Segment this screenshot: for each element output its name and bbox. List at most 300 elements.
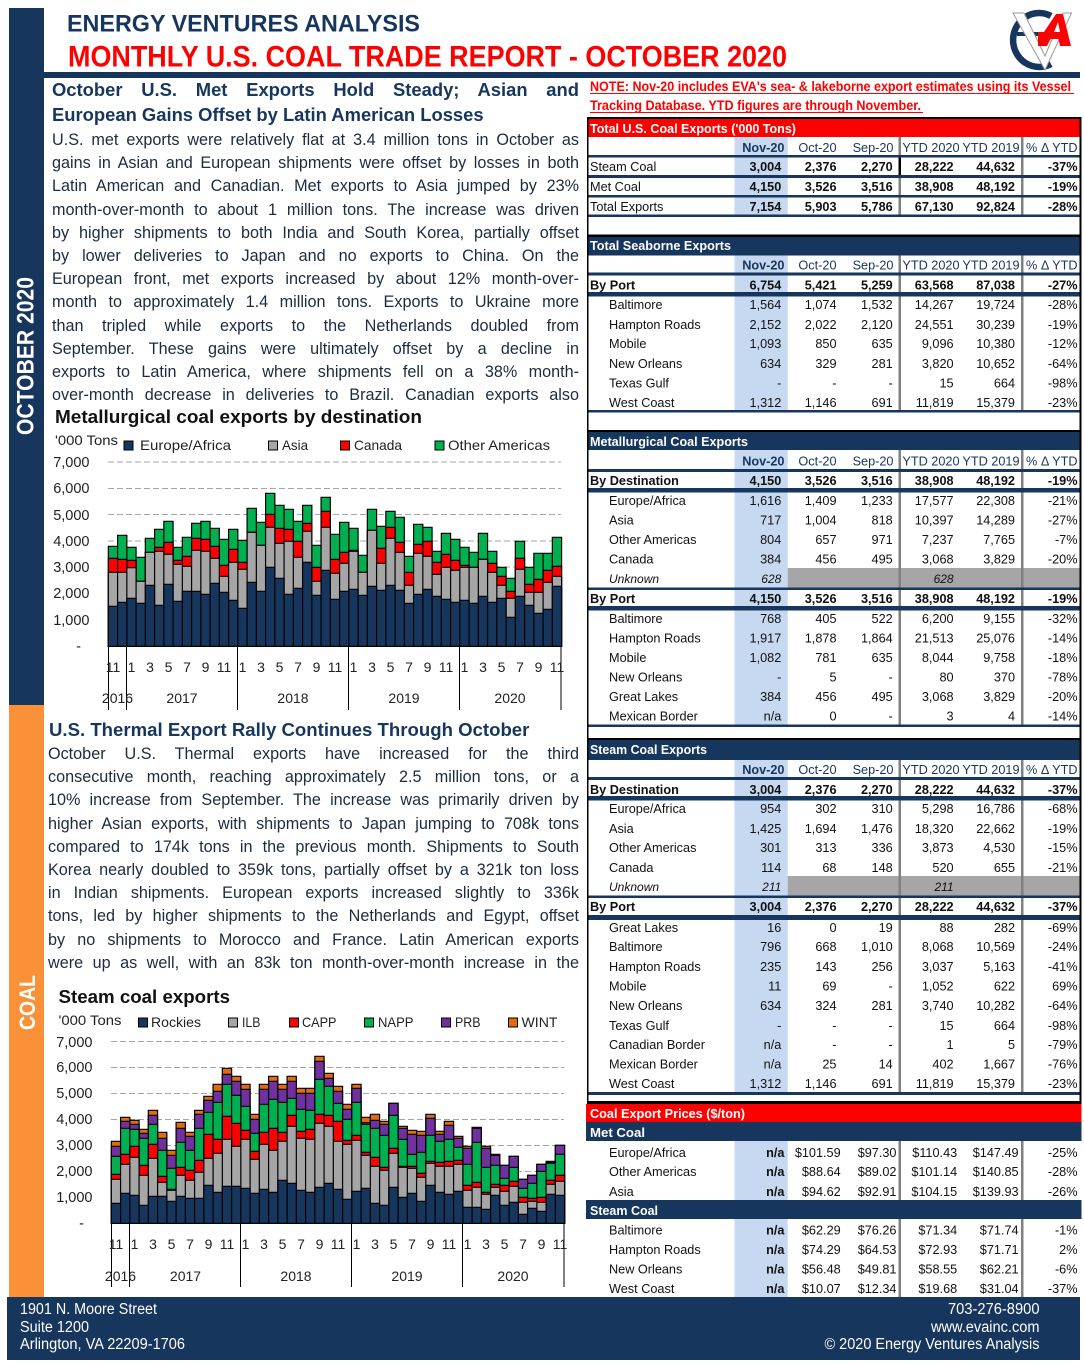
- panel: steam coal exports: 16: [767, 921, 781, 935]
- panel: metallurgical coal exports: 3,516: [861, 474, 893, 488]
- chart y axis: steam: 4,000: [56, 1112, 92, 1128]
- panel: metallurgical coal exports: -: [777, 670, 781, 684]
- panel: total seaborne exports: 1,074: [805, 298, 836, 312]
- panel: metallurgical coal exports: 0: [829, 710, 836, 724]
- panel: steam coal exports: -41%: [1048, 960, 1078, 974]
- panel: total seaborne exports: 2,120: [861, 318, 893, 332]
- panel: coal export prices: $101.59: [795, 1146, 841, 1160]
- title: organisation: ENERGY VENTURES ANALYSIS: [67, 10, 420, 38]
- panel: coal export prices: $140.85: [973, 1165, 1019, 1179]
- panel: steam coal exports: 954: [760, 802, 781, 816]
- panel: total seaborne exports: 63,568: [915, 278, 954, 292]
- panel: metallurgical coal exports: New Orleans: [609, 670, 682, 684]
- panel: steam coal exports: -79%: [1048, 1038, 1078, 1052]
- table backgrounds: blue column, unknown bands, separators: [587, 117, 1082, 1297]
- chart x axis: met: 11: [217, 659, 231, 675]
- panel: total seaborne exports: Hampton Roads: [609, 318, 701, 332]
- panel: metallurgical coal exports: % Δ YTD: [1026, 454, 1078, 468]
- text block: met exports article: over-month decrease in deliveries to Brazil. Canadian exports also: [52, 386, 579, 404]
- panel: metallurgical coal exports: 7,237: [922, 533, 954, 547]
- heading: met exports article: European Gains Offset by Latin American Losses: [52, 104, 484, 125]
- panel: metallurgical coal exports: -14%: [1048, 710, 1078, 724]
- panel: total seaborne exports: 691: [872, 396, 893, 410]
- panel: coal export prices: Steam Coal: [590, 1204, 658, 1218]
- panel: metallurgical coal exports: 628: [934, 572, 954, 586]
- panel: total U.S. coal exports: Total U.S. Coal Exports ('000 Tons): [590, 122, 796, 136]
- panel: coal export prices: Asia: [609, 1185, 635, 1199]
- panel: total seaborne exports: YTD 2020: [902, 258, 960, 272]
- chart x axis: met: 5: [498, 659, 506, 675]
- panel: total seaborne exports: 850: [815, 337, 836, 351]
- panel: steam coal exports: 69: [822, 980, 836, 994]
- panel: steam coal exports: 4,530: [983, 841, 1015, 855]
- panel: total U.S. coal exports: 92,824: [976, 200, 1015, 214]
- panel: steam coal exports: 301: [760, 841, 781, 855]
- panel: steam coal exports: Unknown: [609, 880, 659, 894]
- title: report: MONTHLY U.S. COAL TRADE REPORT - OCTOBER 2020: [68, 40, 787, 74]
- panel: metallurgical coal exports: 635: [872, 651, 893, 665]
- panel: metallurgical coal exports: 7,765: [983, 533, 1015, 547]
- panel: steam coal exports: 211: [761, 880, 781, 894]
- panel: steam coal exports: By Destination: [590, 783, 679, 797]
- chart x axis: steam: 9: [205, 1236, 213, 1252]
- panel: total seaborne exports: -98%: [1048, 376, 1078, 390]
- chart x axis: steam: 3: [371, 1236, 379, 1252]
- chart: metallurgical coal stacked bars: [108, 493, 562, 646]
- panel: coal export prices: $74.29: [802, 1243, 841, 1257]
- panel: total seaborne exports: 11,819: [916, 396, 954, 410]
- panel: coal export prices: n/a: [766, 1165, 785, 1179]
- panel: total seaborne exports: -23%: [1048, 396, 1078, 410]
- panel: metallurgical coal exports: 384: [760, 552, 781, 566]
- panel: steam coal exports: 148: [872, 861, 893, 875]
- text block: met exports article: [52, 131, 579, 404]
- chart x axis: steam: 1: [353, 1236, 361, 1252]
- chart legend: met: Asia: [282, 437, 308, 453]
- panel: coal export prices: -26%: [1048, 1185, 1078, 1199]
- panel: steam coal exports: 69%: [1052, 980, 1078, 994]
- panel: steam coal exports: 211: [933, 880, 954, 894]
- panel: total seaborne exports: 1,312: [750, 396, 781, 410]
- chart x axis: steam: 9: [538, 1236, 546, 1252]
- panel: steam coal exports: 44,632: [976, 783, 1015, 797]
- chart x axis: steam: 2020: [497, 1268, 529, 1284]
- panel: metallurgical coal exports: Sep-20: [853, 454, 894, 468]
- panel: steam coal exports: Great Lakes: [609, 921, 678, 935]
- panel: coal export prices: $139.93: [973, 1185, 1019, 1199]
- panel: coal export prices: West Coast: [609, 1282, 675, 1296]
- chart legend: met: '000 Tons: [55, 432, 118, 448]
- chart x axis: met: 5: [276, 659, 284, 675]
- panel: steam coal exports: Asia: [609, 822, 635, 836]
- chart x axis: met: 7: [405, 659, 413, 675]
- chart y axis: steam: [56, 1035, 92, 1232]
- chart y axis: steam: 5,000: [56, 1086, 92, 1102]
- panel: metallurgical coal exports: Hampton Roads: [609, 632, 701, 646]
- note: Tracking Database. YTD figures are through November.: [590, 97, 921, 113]
- panel: total seaborne exports: Nov-20: [742, 258, 784, 272]
- panel: metallurgical coal exports: 17,577: [915, 494, 954, 508]
- panel: metallurgical coal exports: 14,289: [976, 514, 1015, 528]
- text block: met exports article: by lower deliveries to Japan and no exports to China. On the: [52, 247, 579, 265]
- panel: steam coal exports: 5: [1008, 1038, 1015, 1052]
- panel: steam coal exports: New Orleans: [609, 999, 682, 1013]
- panel: total seaborne exports: 87,038: [976, 278, 1015, 292]
- chart x axis: steam: 1: [131, 1236, 139, 1252]
- chart x axis: steam: 7: [519, 1236, 527, 1252]
- panel: steam coal exports: 28,222: [915, 783, 954, 797]
- panel: steam coal exports: Hampton Roads: [609, 960, 701, 974]
- panel: total seaborne exports: 9,096: [922, 337, 954, 351]
- panel: total seaborne exports: 634: [760, 357, 781, 371]
- panel: total U.S. coal exports: 67,130: [915, 200, 954, 214]
- panel: coal export prices: -25%: [1048, 1146, 1078, 1160]
- panel: metallurgical coal exports: 370: [994, 670, 1015, 684]
- panel: total U.S. coal exports: 3,526: [805, 180, 836, 194]
- panel: total U.S. coal exports: 3,004: [750, 160, 781, 174]
- panel: total seaborne exports: Texas Gulf: [609, 376, 669, 390]
- panel: total U.S. coal exports: Sep-20: [853, 141, 894, 155]
- panel: steam coal exports: 622: [994, 980, 1015, 994]
- panel: total seaborne exports: 19,724: [976, 298, 1015, 312]
- panel: metallurgical coal exports: 8,044: [922, 651, 954, 665]
- panel: steam coal exports: 28,222: [915, 900, 954, 914]
- panel: steam coal exports: 10,569: [976, 940, 1015, 954]
- panel: steam coal exports: 5,163: [983, 960, 1015, 974]
- chart x axis: steam: 2018: [280, 1268, 312, 1284]
- panel: metallurgical coal exports: -7%: [1055, 533, 1078, 547]
- panel: steam coal exports: [588, 740, 1080, 1091]
- chart x axis: steam: 2019: [391, 1268, 423, 1284]
- chart x axis: steam: 1: [242, 1236, 250, 1252]
- panel: total U.S. coal exports: 2,270: [861, 160, 893, 174]
- chart x axis: met: 2019: [388, 690, 420, 706]
- panel: steam coal exports: Mobile: [609, 980, 646, 994]
- chart x axis: steam: 5: [279, 1236, 287, 1252]
- panel: metallurgical coal exports: 768: [760, 612, 781, 626]
- panel: steam coal exports: Baltimore: [609, 940, 663, 954]
- panel: coal export prices: $12.34: [858, 1282, 896, 1296]
- footer: Arlington, VA 22209-1706: [20, 1336, 185, 1353]
- panel: total seaborne exports: 2,152: [750, 318, 781, 332]
- panel: steam coal exports: By Port: [590, 900, 636, 914]
- panel: steam coal exports: 2,376: [805, 900, 836, 914]
- panel: steam coal exports: Canadian Border: [609, 1038, 706, 1052]
- panel: metallurgical coal exports: 384: [760, 690, 781, 704]
- chart x axis: met: 2017: [166, 690, 198, 706]
- chart x axis: steam: 7: [297, 1236, 305, 1252]
- panel: metallurgical coal exports: -: [888, 710, 893, 724]
- chart x axis: steam: 2017: [170, 1268, 201, 1284]
- panel: steam coal exports: 256: [872, 960, 893, 974]
- chart x axis: steam: 7: [186, 1236, 194, 1252]
- panel: metallurgical coal exports: -32%: [1048, 612, 1078, 626]
- panel: total U.S. coal exports: Steam Coal: [590, 160, 656, 174]
- panel: steam coal exports: 16,786: [976, 802, 1015, 816]
- chart x axis: steam: 11: [331, 1236, 345, 1252]
- panel: metallurgical coal exports: 48,192: [976, 592, 1015, 606]
- chart y axis: steam: 2,000: [56, 1164, 92, 1180]
- panel: total seaborne exports: 15,379: [976, 396, 1015, 410]
- chart x axis: met: 2018: [277, 690, 309, 706]
- panel: steam coal exports: 44,632: [976, 900, 1015, 914]
- panel: steam coal exports: 664: [994, 1019, 1015, 1033]
- panel: steam coal exports: n/a: [764, 1038, 782, 1052]
- panel: coal export prices: $147.49: [973, 1146, 1019, 1160]
- chart y axis: met: 2,000: [53, 586, 90, 602]
- panel: total seaborne exports: 1,093: [750, 337, 781, 351]
- panel: steam coal exports: 11: [768, 980, 781, 994]
- panel: steam coal exports: 282: [994, 921, 1015, 935]
- panel: total seaborne exports: 3,820: [922, 357, 954, 371]
- panel: steam coal exports: West Coast: [609, 1077, 675, 1091]
- text block: met exports article: gains in Asian and European shipments were offset by losses in both: [52, 154, 579, 172]
- panel: metallurgical coal exports: Great Lakes: [609, 690, 678, 704]
- panel: steam coal exports: -68%: [1048, 802, 1078, 816]
- chart x axis: met: 1: [350, 659, 358, 675]
- panel: total seaborne exports: YTD 2019: [962, 258, 1020, 272]
- panel: metallurgical coal exports: -20%: [1048, 690, 1078, 704]
- sidebar: Coal: COAL: [15, 975, 40, 1030]
- chart y axis: steam: 6,000: [56, 1060, 92, 1076]
- panel: total U.S. coal exports: 28,222: [915, 160, 954, 174]
- panel: coal export prices: -1%: [1055, 1224, 1078, 1238]
- panel: metallurgical coal exports: 5: [829, 670, 836, 684]
- panel: steam coal exports: Nov-20: [742, 763, 784, 777]
- text block: thermal exports article: October U.S. Thermal exports have increased for the third: [48, 745, 579, 763]
- text block: thermal exports article: tons, led by higher shipments to the Netherlands and Egypt, offset: [48, 907, 579, 925]
- panel: total U.S. coal exports: 5,786: [861, 200, 893, 214]
- panel: total U.S. coal exports: -37%: [1048, 160, 1078, 174]
- chart x axis: steam: 5: [168, 1236, 176, 1252]
- panel: steam coal exports: 402: [932, 1058, 954, 1072]
- panel: coal export prices: $49.81: [858, 1262, 896, 1276]
- panel: steam coal exports: -64%: [1048, 999, 1078, 1013]
- chart x axis: met: 3: [257, 659, 265, 675]
- panel: steam coal exports: % Δ YTD: [1026, 763, 1078, 777]
- chart y axis: met: 6,000: [53, 481, 90, 497]
- chart legend: met: [55, 432, 550, 453]
- panel: steam coal exports: 1,425: [750, 822, 781, 836]
- chart x axis: met: 1: [461, 659, 469, 675]
- panel: total seaborne exports: 24,551: [915, 318, 954, 332]
- panel: steam coal exports: 25: [822, 1058, 836, 1072]
- panel: total U.S. coal exports: 3,516: [861, 180, 893, 194]
- panel: metallurgical coal exports: -21%: [1048, 494, 1078, 508]
- panel: total seaborne exports: 1,532: [861, 298, 893, 312]
- text block: met exports article: month-over-month to about 1 million tons. The increase was driven: [52, 201, 579, 219]
- chart x axis: met: 7: [516, 659, 524, 675]
- chart x axis: steam: 9: [427, 1236, 435, 1252]
- panel: coal export prices: n/a: [766, 1224, 785, 1238]
- panel: steam coal exports: 1,052: [922, 980, 954, 994]
- footer: © 2020 Energy Ventures Analysis: [824, 1336, 1040, 1353]
- panel: total U.S. coal exports: Nov-20: [742, 141, 784, 155]
- text block: met exports article: month to approximately 1.4 million tons. Exports to Ukraine more: [52, 293, 579, 311]
- panel: total seaborne exports: 1,564: [750, 298, 781, 312]
- panel: metallurgical coal exports: Asia: [609, 514, 635, 528]
- panel: metallurgical coal exports: -: [888, 670, 893, 684]
- panel: steam coal exports: 691: [872, 1077, 893, 1091]
- panel: steam coal exports: 18,320: [915, 822, 954, 836]
- panel: coal export prices: $58.55: [918, 1262, 957, 1276]
- panel: coal export prices: $88.64: [802, 1165, 841, 1179]
- panel: metallurgical coal exports: 1,409: [805, 494, 836, 508]
- panel: total U.S. coal exports: 44,632: [976, 160, 1015, 174]
- panel: steam coal exports: -: [832, 1038, 836, 1052]
- chart: steam gridlines: [111, 1042, 564, 1198]
- note: [590, 78, 1074, 113]
- panel: metallurgical coal exports: 3,068: [922, 690, 954, 704]
- panel: metallurgical coal exports: 9,758: [983, 651, 1015, 665]
- panel: metallurgical coal exports: 1,864: [861, 632, 893, 646]
- chart x axis: steam: 3: [149, 1236, 157, 1252]
- panel: steam coal exports: 3,037: [922, 960, 954, 974]
- panel: coal export prices: $56.48: [802, 1262, 841, 1276]
- panel: steam coal exports: Europe/Africa: [609, 802, 687, 816]
- chart y axis: steam: 3,000: [56, 1138, 92, 1154]
- panel: total seaborne exports: Baltimore: [609, 298, 663, 312]
- panel: total U.S. coal exports: Oct-20: [798, 141, 836, 155]
- chart x axis: steam: 3: [482, 1236, 490, 1252]
- chart x axis: met: 7: [183, 659, 191, 675]
- panel: total U.S. coal exports: Met Coal: [590, 180, 641, 194]
- chart legend: steam: Rockies: [151, 1014, 201, 1030]
- chart y axis: met: 4,000: [53, 534, 90, 550]
- chart x axis: met: 9: [535, 659, 543, 675]
- panel: metallurgical coal exports: 4,150: [750, 592, 781, 606]
- chart x axis: steam: 5: [390, 1236, 398, 1252]
- chart y axis: steam: 7,000: [56, 1035, 92, 1051]
- panel: steam coal exports: 310: [872, 802, 893, 816]
- panel: metallurgical coal exports: 25,076: [976, 632, 1015, 646]
- panel: steam coal exports: Sep-20: [853, 763, 894, 777]
- text block: met exports article: U.S. met exports were relatively flat at 3.4 million tons in October as: [52, 131, 579, 149]
- panel: metallurgical coal exports: -19%: [1048, 474, 1078, 488]
- chart x axis: met: 9: [313, 659, 321, 675]
- panel: coal export prices: n/a: [766, 1262, 785, 1276]
- text block: met exports article: exports to Latin America, where shipments fell on a 38% month-: [52, 363, 579, 381]
- panel: total U.S. coal exports: 48,192: [976, 180, 1015, 194]
- panel: total seaborne exports: -: [777, 376, 781, 390]
- chart x axis: met: 11: [439, 659, 453, 675]
- panel: steam coal exports: -: [888, 1019, 893, 1033]
- panel: metallurgical coal exports: n/a: [764, 710, 782, 724]
- panel: total seaborne exports: 1,146: [805, 396, 836, 410]
- panel: metallurgical coal exports: 6,200: [922, 612, 954, 626]
- panel: steam coal exports: -: [888, 1038, 893, 1052]
- panel: total seaborne exports: 30,239: [976, 318, 1015, 332]
- panel: steam coal exports: 281: [872, 999, 893, 1013]
- panel: metallurgical coal exports: Unknown: [609, 572, 659, 586]
- panel: metallurgical coal exports: 495: [872, 690, 893, 704]
- panel: steam coal exports: -21%: [1048, 861, 1078, 875]
- panel: steam coal exports: 22,662: [976, 822, 1015, 836]
- panel: steam coal exports: 2,376: [805, 783, 836, 797]
- panel: steam coal exports: 68: [822, 861, 836, 875]
- panel: metallurgical coal exports: Baltimore: [609, 612, 663, 626]
- chart x axis: steam: 7: [408, 1236, 416, 1252]
- footer: www.evainc.com: [930, 1319, 1040, 1336]
- panel: metallurgical coal exports: 3,829: [983, 552, 1015, 566]
- chart x axis: met: 11: [328, 659, 342, 675]
- panel: steam coal exports: 14: [879, 1058, 893, 1072]
- panel: total seaborne exports: Sep-20: [853, 258, 894, 272]
- chart legend: met: Europe/Africa: [140, 437, 231, 453]
- panel: metallurgical coal exports: -18%: [1048, 651, 1078, 665]
- panel: steam coal exports: 336: [872, 841, 893, 855]
- panel: coal export prices: [586, 1104, 1082, 1296]
- chart legend: steam: CAPP: [302, 1014, 336, 1030]
- footer: 703-276-8900: [948, 1301, 1040, 1318]
- panel: coal export prices: -6%: [1055, 1262, 1078, 1276]
- chart x axis: met: [102, 646, 564, 710]
- panel: metallurgical coal exports: 1,616: [750, 494, 781, 508]
- chart x axis: steam: 9: [316, 1236, 324, 1252]
- panel: metallurgical coal exports: 495: [872, 552, 893, 566]
- chart x axis: met: 3: [368, 659, 376, 675]
- panel: metallurgical coal exports: Mexican Border: [609, 710, 699, 724]
- panel: coal export prices: $62.29: [802, 1224, 841, 1238]
- panel: steam coal exports: 1: [947, 1038, 954, 1052]
- panel: total seaborne exports: % Δ YTD: [1026, 258, 1078, 272]
- panel: steam coal exports: 655: [994, 861, 1015, 875]
- panel: steam coal exports: 3,004: [750, 783, 781, 797]
- panel: metallurgical coal exports: Nov-20: [742, 454, 784, 468]
- panel: steam coal exports: n/a: [764, 1058, 782, 1072]
- panel: steam coal exports: 313: [815, 841, 836, 855]
- text block: met exports article: September. These gains were ultimately offset by a decline in: [52, 340, 579, 358]
- heading: met exports article: October U.S. Met Exports Hold Steady; Asian and: [52, 79, 579, 100]
- chart y axis: met: 1,000: [53, 613, 90, 629]
- panel: total U.S. coal exports: 7,154: [750, 200, 781, 214]
- panel: total seaborne exports: 5,259: [861, 278, 893, 292]
- panel: coal export prices: $72.93: [918, 1243, 957, 1257]
- chart legend: steam: WINT: [522, 1014, 558, 1030]
- chart x axis: steam: 11: [220, 1236, 234, 1252]
- panel: metallurgical coal exports: 456: [815, 552, 836, 566]
- panel: metallurgical coal exports: 38,908: [915, 592, 954, 606]
- panel: total seaborne exports: 14,267: [915, 298, 954, 312]
- panel: metallurgical coal exports: YTD 2019: [962, 454, 1020, 468]
- text block: met exports article: Latin American and Canadian. Met exports to Asia jumped by 23%: [52, 177, 579, 195]
- chart x axis: steam: [105, 1223, 567, 1287]
- chart legend: met: Other Americas: [448, 437, 550, 453]
- panel: metallurgical coal exports: Other Americas: [609, 533, 696, 547]
- panel: coal export prices: n/a: [766, 1146, 785, 1160]
- panel: steam coal exports: 10,282: [976, 999, 1015, 1013]
- panel: coal export prices: $19.68: [918, 1282, 957, 1296]
- panel: coal export prices: $104.15: [911, 1185, 957, 1199]
- panel: metallurgical coal exports: 3,516: [861, 592, 893, 606]
- panel: metallurgical coal exports: 405: [815, 612, 836, 626]
- panel: total seaborne exports: 2,022: [805, 318, 836, 332]
- footer: 1901 N. Moore Street: [20, 1301, 158, 1318]
- panel: coal export prices: 2%: [1059, 1243, 1078, 1257]
- panel: steam coal exports: 114: [761, 861, 781, 875]
- panel: total seaborne exports: -19%: [1048, 318, 1078, 332]
- panel: coal export prices: Baltimore: [609, 1224, 663, 1238]
- icon: EVA logo: [1013, 13, 1072, 70]
- panel: steam coal exports: 19: [879, 921, 893, 935]
- sidebar: October 2020: OCTOBER 2020: [12, 277, 40, 435]
- panel: metallurgical coal exports: 1,233: [861, 494, 893, 508]
- panel: steam coal exports: Steam Coal Exports: [590, 743, 707, 757]
- panel: metallurgical coal exports: 4: [1008, 710, 1015, 724]
- panel: steam coal exports: -37%: [1048, 783, 1078, 797]
- chart heading: steam: Steam coal exports: [58, 987, 230, 1007]
- panel: steam coal exports: 668: [815, 940, 836, 954]
